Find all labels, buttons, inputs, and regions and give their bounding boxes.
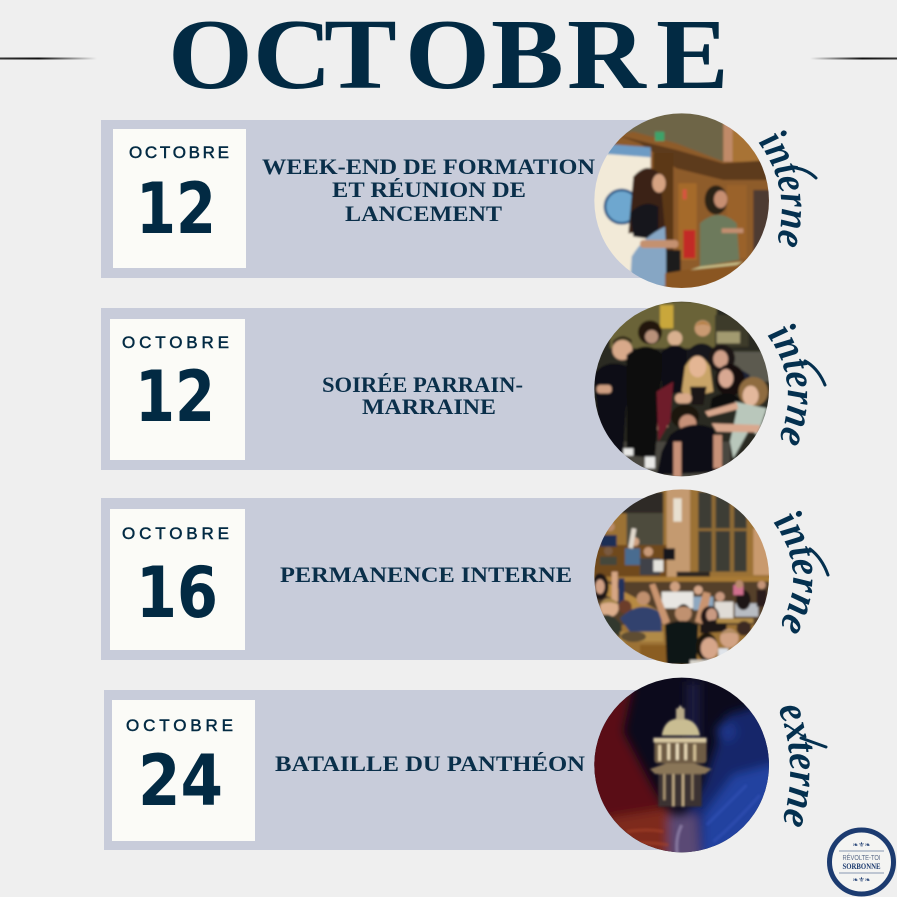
date card <box>110 319 245 460</box>
photo: Panthéon in red and blue canyon <box>594 678 769 852</box>
event title: SOIRÉE PARRAIN- <box>322 372 523 397</box>
decorative line left <box>0 58 97 60</box>
event title: LANCEMENT <box>345 201 502 226</box>
logo badge: ❧⚜❧ <box>852 841 871 849</box>
photo: group of friends at night <box>594 302 769 476</box>
date card: 12 <box>135 356 215 438</box>
date card: 24 <box>138 740 223 822</box>
date card: 16 <box>136 552 218 634</box>
date card <box>110 509 245 650</box>
event title: PERMANENCE INTERNE <box>280 562 572 587</box>
date card: 12 <box>136 168 216 250</box>
date card: OCTOBRE <box>122 524 229 543</box>
event title: WEEK-END DE FORMATION <box>262 154 595 179</box>
logo badge: SORBONNE <box>842 861 881 871</box>
date card <box>112 700 255 841</box>
logo badge: RÉVOLTE-TOI <box>842 853 880 862</box>
logo badge <box>830 830 894 894</box>
photo: students in amphitheatre <box>590 488 777 668</box>
label: externe: externe <box>780 706 813 827</box>
photo: two speakers in wood-panelled hall <box>594 113 769 288</box>
date card: OCTOBRE <box>126 716 233 735</box>
panel background <box>101 308 661 470</box>
panel: event 1 <box>101 113 818 288</box>
panel: event 2 <box>101 302 827 476</box>
title: OCTOBRE <box>168 0 729 110</box>
label: interne: interne <box>774 510 812 634</box>
panel: event 4 <box>104 678 828 852</box>
decorative line right <box>810 58 897 60</box>
event title: MARRAINE <box>362 394 496 419</box>
panel background <box>104 690 664 850</box>
date card <box>113 129 246 268</box>
event title <box>262 154 595 226</box>
logo badge: ❧⚜❧ <box>852 876 871 884</box>
panel background <box>101 498 661 660</box>
date card: OCTOBRE <box>122 333 229 352</box>
event title: ET RÉUNION DE <box>332 177 526 202</box>
label: interne: interne <box>768 324 808 446</box>
date card: OCTOBRE <box>129 143 229 162</box>
label: interne: interne <box>758 130 802 248</box>
panel background <box>101 120 661 278</box>
event title: BATAILLE DU PANTHÉON <box>275 751 585 776</box>
event title <box>322 372 523 419</box>
panel: event 3 <box>101 489 830 664</box>
